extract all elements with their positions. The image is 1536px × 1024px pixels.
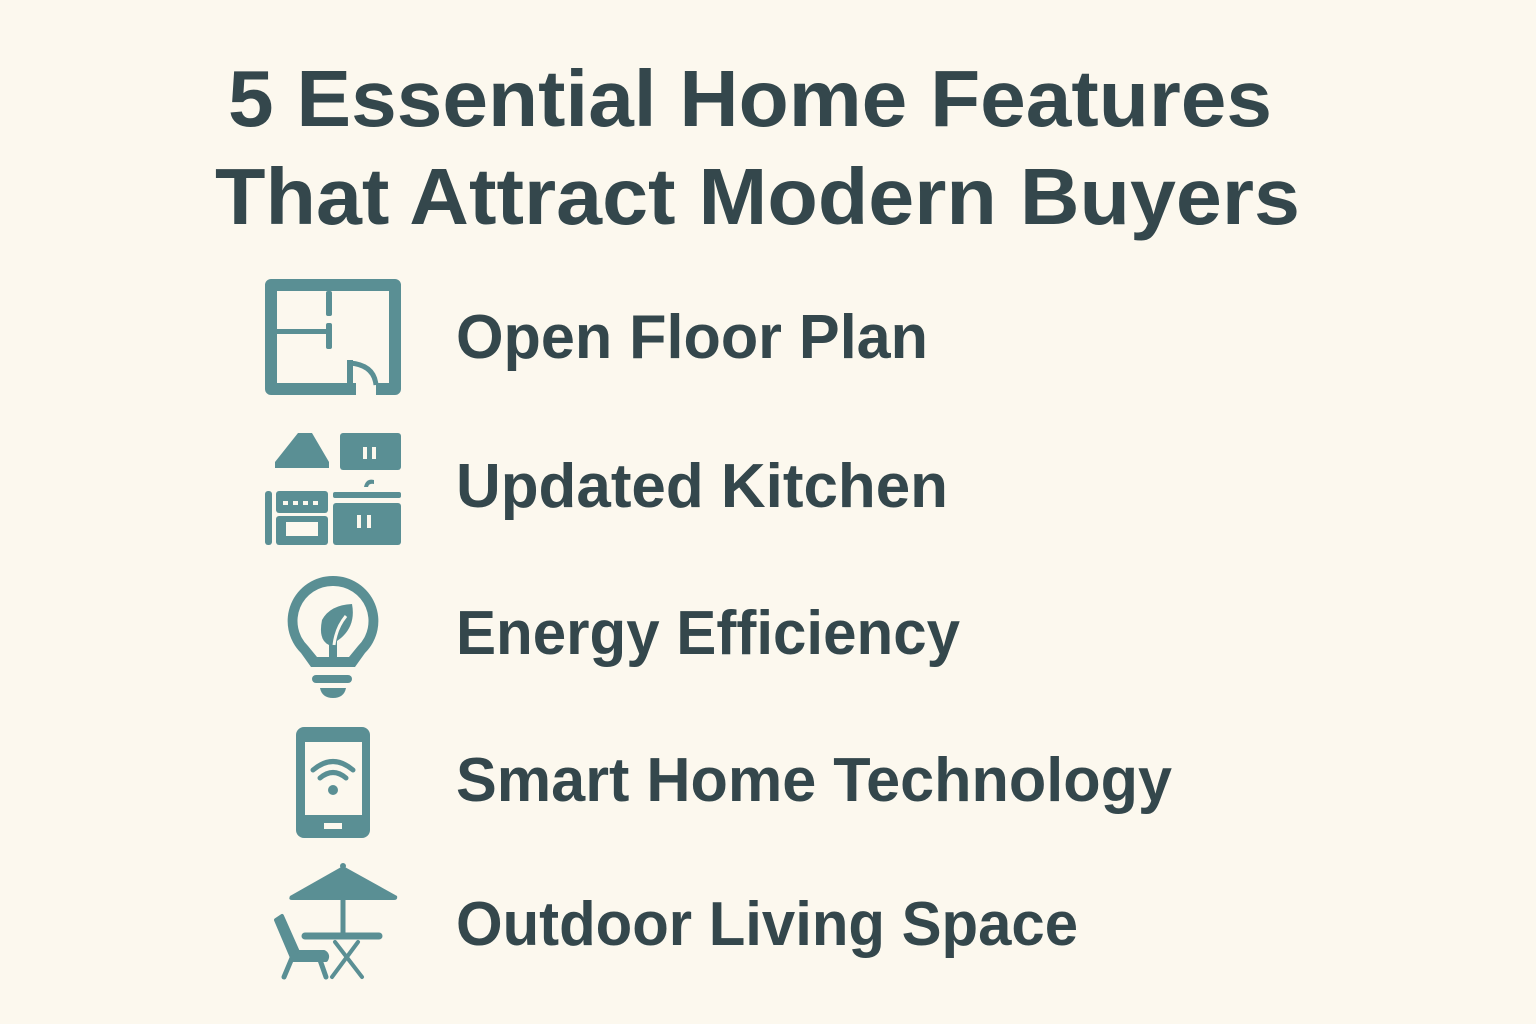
icon: kitchen <box>265 433 401 545</box>
icon: outdoor umbrella <box>276 863 397 977</box>
title <box>215 54 1300 241</box>
label: outdoor living space: Outdoor Living Space <box>456 890 1078 959</box>
label: energy efficiency: Energy Efficiency <box>456 599 960 668</box>
icon: smartphone wifi <box>296 727 370 838</box>
title: 5 Essential Home Features <box>228 54 1272 143</box>
title: That Attract Modern Buyers <box>215 152 1300 241</box>
icon: light bulb <box>288 576 378 698</box>
label: updated kitchen: Updated Kitchen <box>456 452 948 521</box>
label: smart home technology: Smart Home Technology <box>456 746 1173 815</box>
label: open floor plan: Open Floor Plan <box>456 303 928 372</box>
icon: floor plan <box>271 285 395 395</box>
